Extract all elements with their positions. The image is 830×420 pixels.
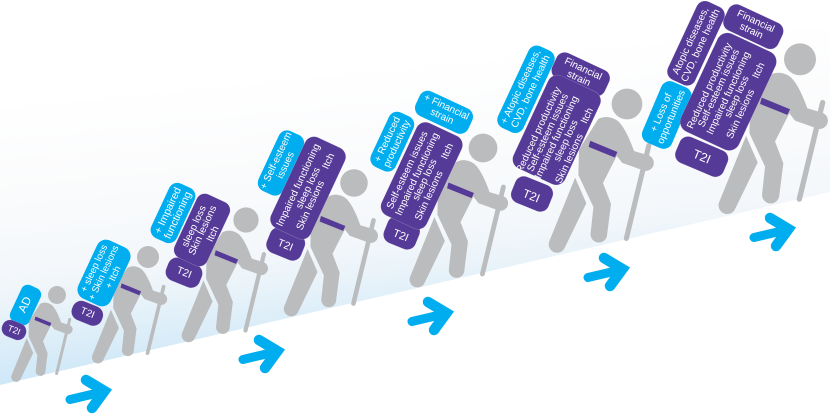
hiker 2: sleep loss <box>69 236 167 363</box>
figure <box>11 286 73 382</box>
pack: main burdens: Skin lesions <box>295 179 327 232</box>
pack: main burdens: Skin lesions <box>725 88 757 141</box>
pack: added burdens: + Skin lesions <box>86 244 122 302</box>
pack: impaired functioning <box>148 180 198 246</box>
pack: main burdens: Skin lesions <box>187 204 219 257</box>
pack: T2I: T2I <box>521 186 542 206</box>
pack: main burdens: sleep loss <box>180 204 209 249</box>
pack: loss of opportunities <box>639 78 694 152</box>
pack: added burdens: + sleep loss <box>79 243 110 294</box>
figure <box>410 134 508 287</box>
pack: T2I <box>263 225 308 263</box>
pack: impaired functioning: + Impaired <box>152 185 184 236</box>
pack: reduced productivity: + Reduced <box>373 115 403 164</box>
figure <box>92 246 167 363</box>
pack: self-esteem: issues <box>275 150 297 180</box>
pack: financial strain: Financial <box>735 8 776 35</box>
pack: main burdens <box>508 72 605 192</box>
pack: main burdens: Impaired functioning <box>705 50 753 136</box>
pack: reduced productivity <box>367 109 417 175</box>
pack: T2I: T2I <box>391 227 410 244</box>
pack: atopic diseases: + Atopic diseases, <box>499 48 543 126</box>
hiker 6: atopic diseases <box>494 43 654 253</box>
pack: impaired functioning: functioning <box>162 190 194 241</box>
pack: added burdens <box>74 236 134 310</box>
pack: loss of opportunities: opportunities <box>656 89 688 146</box>
pack: main burdens: sleep loss <box>552 119 581 163</box>
arrow 5 <box>754 218 788 246</box>
pack: atopic diseases: CVD, bone health <box>679 8 723 84</box>
pack: T2I: T2I <box>175 264 193 281</box>
hiker 3: impaired functioning <box>148 180 268 342</box>
pack: main burdens: Impaired functioning <box>275 142 323 228</box>
pack: main burdens: Reduced productivity <box>514 85 564 175</box>
arrow 4 <box>588 258 622 286</box>
figure <box>719 43 828 214</box>
pack: main burdens: Reduced productivity <box>685 41 735 131</box>
pack: loss of opportunities: + Loss of <box>649 92 675 134</box>
pack: self-esteem: + Self-esteem <box>258 130 295 191</box>
arrow 1 <box>70 380 104 408</box>
pack: T2I: T2I <box>276 237 295 254</box>
pack: financial strain: + Financial <box>422 92 471 123</box>
arrow 3 <box>412 302 446 330</box>
pack: T2I: T2I <box>6 323 22 337</box>
hiker 7: loss of opportunities <box>639 0 828 214</box>
figure <box>284 169 378 316</box>
pack: main burdens <box>267 133 349 243</box>
pack: financial strain <box>549 49 613 99</box>
pack: main burdens: Self-esteem issues <box>696 48 742 129</box>
figure <box>549 89 654 253</box>
pack: main burdens: Skin lesions <box>413 169 446 222</box>
pack: main burdens: Self-esteem issues <box>385 130 431 211</box>
pack: T2I <box>672 134 731 180</box>
pack: main burdens: sleep loss <box>411 158 440 203</box>
pack: main burdens <box>171 191 233 269</box>
pack: main burdens: Itch <box>751 61 767 80</box>
pack: added burdens: + Itch <box>104 264 124 291</box>
pack: T2I: T2I <box>79 305 96 321</box>
pack: financial strain: strain <box>738 21 765 41</box>
pack: self-esteem <box>255 127 307 199</box>
pack: main burdens <box>676 29 780 154</box>
pack: main burdens <box>377 119 466 232</box>
pack: atopic diseases: CVD, bone health <box>509 54 553 130</box>
pack: T2I <box>508 174 556 214</box>
pack: atopic diseases: Atopic diseases, <box>671 6 711 76</box>
pack: main burdens: Itch <box>321 152 337 171</box>
pack: financial strain: Financial <box>563 56 603 83</box>
hiker 5: productivity and strain <box>367 88 508 287</box>
pack: atopic diseases <box>664 0 728 89</box>
pack: financial strain: strain <box>428 107 455 127</box>
pack: main burdens: sleep loss <box>723 75 752 119</box>
pack: reduced productivity: productivity <box>382 119 413 169</box>
pack: financial strain <box>720 1 786 52</box>
pack: main burdens: Impaired functioning <box>533 95 581 181</box>
pack: T2I <box>381 214 423 252</box>
pack: main burdens: Itch <box>579 106 596 126</box>
pack: financial strain: strain <box>565 69 592 89</box>
pack: main burdens: Skin lesions <box>553 132 586 185</box>
pack: atopic diseases <box>494 43 558 136</box>
hiker 4: self-esteem <box>255 127 378 316</box>
pack: AD: AD <box>17 295 34 315</box>
pack: main burdens: Itch <box>439 142 456 161</box>
hiker 1: AD <box>0 282 73 382</box>
pack: T2I <box>163 255 205 291</box>
pack: T2I: T2I <box>691 147 713 167</box>
pack: financial strain <box>412 88 476 137</box>
pack: main burdens: sleep loss <box>294 166 323 211</box>
pack: main burdens: Itch <box>205 225 222 244</box>
figure <box>182 207 268 342</box>
pack: main burdens: Impaired functioning <box>394 131 442 218</box>
pack: main burdens: Self-esteem issues <box>525 92 571 173</box>
arrow 2 <box>243 340 277 368</box>
